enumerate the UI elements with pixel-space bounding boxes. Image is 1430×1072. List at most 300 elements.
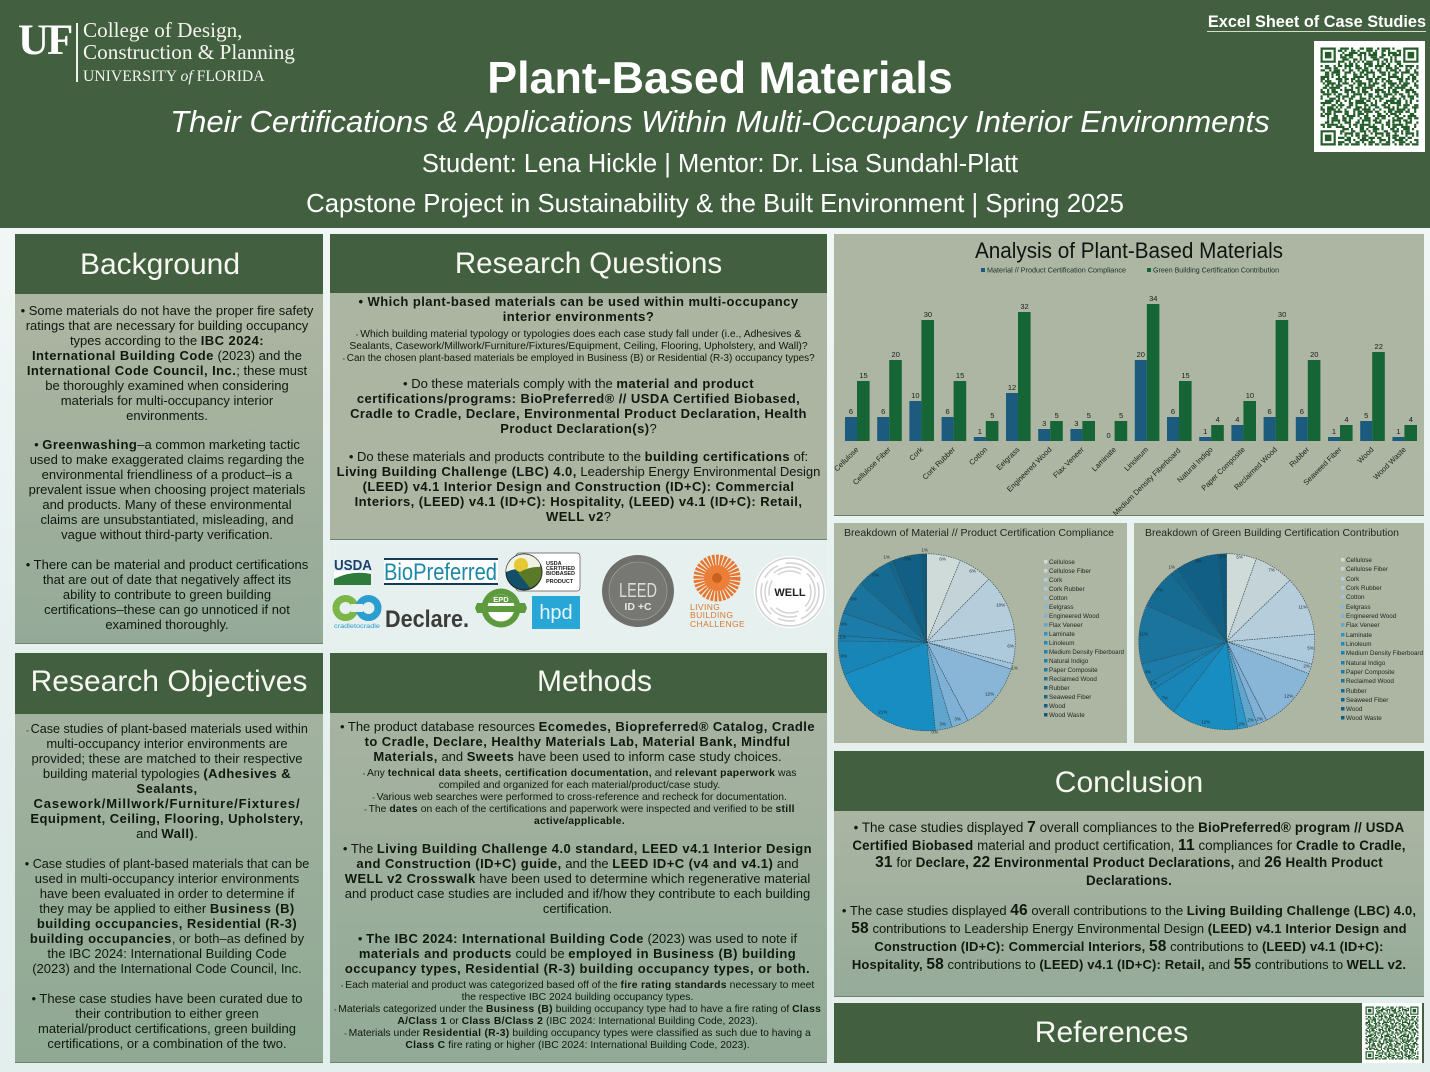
chart legend: Green Building Certification Contribution: [1153, 268, 1279, 274]
pie legend: Eelgrass: [1049, 604, 1074, 611]
pie legend: Cotton: [1049, 595, 1068, 602]
question 3: • Do these materials and products contribute to the building certifications of:: [349, 449, 808, 464]
panel: methods: [330, 653, 827, 1063]
bars: Medium Density Fiberboard: Medium Density Fiberboard: [1111, 446, 1182, 516]
pie legend: [1044, 559, 1124, 719]
text: LBC and LEED guides: and Construction (ID+C) guide, and the LEED ID+C (v4 and v4.1) and: [356, 856, 799, 871]
pie legend: Engineered Wood: [1049, 613, 1100, 620]
pie legend: Cellulose: [1049, 559, 1075, 566]
text: out of date certifications: ability to contribute to green building: [63, 587, 271, 602]
text: case studies matched: provided; these are matched to their respective: [32, 751, 302, 766]
pie percent labels: 1%: [883, 554, 890, 559]
logo: USDA certified biobased: BIOBASED: [546, 571, 575, 577]
bars: Cellulose Fiber: [851, 350, 902, 487]
research objectives body: [15, 714, 323, 1063]
UF monogram: UF: [18, 17, 71, 64]
pie percent labels: 2%: [1247, 718, 1254, 723]
bars: Paper Composite: 10: [1246, 391, 1254, 400]
text: occupancy evaluation: [25, 857, 309, 976]
pie percent labels: [1139, 554, 1314, 727]
bars: Cork: Cork: [907, 445, 925, 463]
pie percent labels: 4%: [840, 621, 847, 626]
pie legend: Wood Waste: [1346, 715, 1382, 722]
bars: Flax Veneer: 5: [1087, 411, 1091, 420]
bars: Reclaimed Wood: 30: [1278, 310, 1286, 319]
logo: USDA certified biobased: PRODUCT: [546, 579, 574, 585]
bars: Rubber: Rubber: [1287, 445, 1312, 469]
text: case studies matched: ◦ Case studies of plant-based materials used within: [26, 722, 308, 736]
question 3: Interiors, (LEED) v4.1 (ID+C): Hospitality, (LEED) v4.1 (ID+C): Retail,: [355, 494, 802, 509]
chart legend: Material // Product Certification Compliance: [987, 268, 1126, 274]
bars: Cellulose Fiber: 20: [892, 350, 900, 359]
bars: Cotton: 1: [978, 427, 982, 436]
bars: Eelgrass: [994, 302, 1031, 472]
pie legend: Rubber: [1346, 688, 1367, 695]
bars: Cork Rubber: [921, 371, 966, 481]
heading: conclusion: [834, 751, 1424, 811]
pie slices: [838, 554, 1015, 731]
logo: Living Building Challenge: LIVING: [690, 602, 720, 612]
bar chart: analysis of plant-based materials: [834, 234, 1424, 516]
pie percent labels: 11%: [1298, 605, 1307, 610]
title: Plant-Based Materials: [487, 53, 953, 103]
text: occupancy evaluation: • Case studies of plant-based materials that can be: [25, 857, 309, 871]
bars: Laminate: Laminate: [1090, 445, 1118, 473]
pie legend: Linoleum: [1346, 641, 1372, 648]
logo: WELL: [754, 556, 826, 628]
text: fire rating sub-points: A/Class 1 or Class B/Class 2 (IBC 2024: International Building Code, 2023).: [397, 1016, 758, 1027]
logo: Living Building Challenge: [690, 561, 745, 629]
text: occupancy evaluation: have been evaluated in order to determine if: [40, 886, 294, 901]
pie legend: Laminate: [1346, 632, 1372, 639]
pie legend: Flax Veneer: [1346, 622, 1380, 629]
bars: Eelgrass: Eelgrass: [994, 445, 1022, 472]
bars: Cork: [907, 310, 934, 463]
logo: Living Building Challenge: BUILDING: [690, 610, 733, 620]
bars: Rubber: [1287, 350, 1320, 469]
question 1 sub-points: ◦ Which building material typology or typologies does each case study fall under (i.e., Adhesives &: [356, 329, 801, 340]
pie legend: Cellulose Fiber: [1346, 566, 1388, 573]
pie legend: Reclaimed Wood: [1346, 678, 1394, 685]
college name: [83, 18, 295, 64]
pie percent labels: 10%: [996, 602, 1005, 607]
text: IBC: materials and products could be employed in Business (B) building: [359, 946, 796, 961]
text: product databases: [340, 719, 815, 764]
bars: Reclaimed Wood: 6: [1268, 407, 1272, 416]
pie legend: Cork Rubber: [1346, 585, 1382, 592]
pie percent labels: 21%: [878, 709, 887, 714]
bars: Medium Density Fiberboard: 6: [1171, 407, 1175, 416]
text: IBC: [345, 931, 810, 976]
panel: conclusion: [834, 751, 1424, 997]
bars: Cellulose: 15: [859, 371, 868, 380]
pie percent labels: 8%: [1195, 559, 1202, 564]
pie legend: Natural Indigo: [1049, 658, 1089, 665]
logo: LEED ID+C: LEED: [619, 580, 657, 602]
logo: USDA certified biobased: [506, 553, 580, 591]
pie percent labels: 6%: [872, 572, 879, 577]
subtitle: Their Certifications & Applications Within Multi-Occupancy Interior Environments: [170, 104, 1270, 139]
research questions body: [330, 293, 827, 540]
pie legend: Laminate: [1049, 631, 1075, 638]
heading: conclusion: Conclusion: [1055, 766, 1203, 799]
pie percent labels: 2%: [1238, 722, 1245, 727]
pie percent labels: 12%: [1284, 694, 1293, 699]
question 3: WELL v2?: [546, 509, 611, 524]
bars: Engineered Wood: 5: [1055, 411, 1059, 420]
logo: USDA certified biobased: USDA: [546, 561, 562, 567]
text: case studies matched: and Wall).: [136, 826, 198, 841]
text: greenwashing: and products. Many of these environmental: [42, 497, 292, 512]
text: fire safety: International Code Council, Inc.; these must: [27, 363, 307, 378]
QR code: case studies: [1314, 41, 1425, 152]
pie percent labels: 6%: [969, 568, 976, 573]
pie percent labels: 1%: [1150, 681, 1157, 686]
logo: HPD: hpd: [539, 602, 573, 624]
question 3: Living Building Challenge (LBC) 4.0, Leadership Energy Environmental Design: [337, 464, 820, 479]
pie percent labels: 6%: [1007, 643, 1014, 648]
text: green building contribution findings: • The case studies displayed 46 overall contributions to the Living Building Challenge (LBC) 4.0,: [842, 902, 1416, 919]
text: LBC and LEED guides: WELL v2 Crosswalk have been used to determine which regenerative material: [345, 871, 810, 886]
pie legend: Paper Composite: [1049, 667, 1098, 674]
text: documentation sub-points: ◦ Various web searches were performed to cross-reference and recheck for documentation.: [372, 792, 787, 803]
pie legend: Seaweed Fiber: [1346, 697, 1388, 704]
text: documentation sub-points: active/applicable.: [534, 816, 625, 827]
bars: Medium Density Fiberboard: [1111, 371, 1192, 518]
pie legend: Wood: [1346, 706, 1363, 713]
pie percent labels: 1%: [1011, 665, 1018, 670]
question 1: interior environments?: [503, 309, 654, 324]
methods body: [330, 713, 827, 1063]
bars: Cellulose: [832, 371, 870, 473]
chart title: Analysis of Plant-Based Materials: [975, 238, 1283, 263]
bars: Paper Composite: 4: [1235, 415, 1239, 424]
heading: methods: Methods: [537, 665, 652, 698]
logo divider: [76, 23, 78, 82]
pie legend: Cork: [1346, 576, 1360, 583]
panel: research questions: [330, 234, 827, 540]
text: fire safety: • Some materials do not have the proper fire safety: [21, 303, 313, 318]
text: out of date certifications: examined thoroughly.: [105, 617, 229, 632]
text: product databases: Materials, and Sweets have been used to inform case study choices.: [373, 749, 782, 764]
question 3: [337, 449, 820, 524]
text: greenwashing: vague without third-party verification.: [61, 527, 273, 542]
bars: Reclaimed Wood: Reclaimed Wood: [1232, 445, 1279, 492]
question 3: (LEED) v4.1 Interior Design and Construction (ID+C): Commercial: [363, 479, 794, 494]
bars: Cotton: [967, 411, 998, 467]
bars: Rubber: 20: [1310, 350, 1318, 359]
pie legend: Wood: [1049, 703, 1066, 710]
bars: Engineered Wood: Engineered Wood: [1005, 445, 1054, 494]
bars: Eelgrass: 32: [1020, 302, 1029, 311]
bars: Wood: 22: [1375, 342, 1383, 351]
text: LBC and LEED guides: • The Living Building Challenge 4.0 standard, LEED v4.1 Interior Design: [343, 841, 812, 856]
pie percent labels: 11%: [1139, 632, 1148, 637]
heading: background: [15, 234, 323, 294]
text: occupancy evaluation: they may be applied to either Business (B): [39, 901, 295, 916]
text: curation: certifications, or a combination of the two.: [47, 1036, 287, 1051]
question 1 sub-points: Sealants, Casework/Millwork/Furniture/Fixtures/Equipment, Ceiling, Flooring, Upholstery, and Wall)?: [349, 341, 808, 352]
pie percent labels: 6%: [850, 596, 857, 601]
heading: methods: [330, 653, 827, 713]
text: greenwashing: [29, 437, 305, 542]
pie percent labels: 7%: [1161, 696, 1168, 701]
pie percent labels: 12%: [985, 691, 994, 696]
text: case studies matched: multi-occupancy interior environments are: [46, 736, 288, 751]
pie title: Breakdown of Green Building Certification Contribution: [1145, 527, 1399, 539]
pie legend: Linoleum: [1049, 640, 1075, 647]
bars: Rubber: 6: [1300, 407, 1304, 416]
text: green building contribution findings: [842, 902, 1416, 973]
pie legend: Engineered Wood: [1346, 613, 1397, 620]
text: case studies matched: Equipment, Ceiling, Flooring, Upholstery,: [30, 811, 304, 826]
text: fire rating sub-points: the respective IBC 2024 building occupancy types.: [462, 992, 693, 1003]
pie chart: green building certification contribution: [1134, 523, 1424, 743]
pie legend: Paper Composite: [1346, 669, 1395, 676]
bars: Wood: Wood: [1355, 445, 1376, 465]
pie percent labels: 4%: [1144, 670, 1151, 675]
bars: Cotton: 5: [990, 411, 994, 420]
pie percent labels: 6%: [939, 556, 946, 561]
pie percent labels: 2%: [1303, 664, 1310, 669]
text: out of date certifications: [26, 557, 308, 632]
pie title: Breakdown of Material // Product Certification Compliance: [844, 527, 1114, 539]
text: IBC: • The IBC 2024: International Building Code (2023) was used to note if: [358, 931, 797, 946]
pie percent labels: 7%: [1268, 568, 1275, 573]
text: certification compliance findings: Certified Biobased material and product certification, 11 compliances for Cradle to Cradle,: [852, 836, 1406, 854]
text: out of date certifications: certifications–these can go unnoticed if not: [44, 602, 290, 617]
pie legend: Cellulose Fiber: [1049, 568, 1091, 575]
bars: Reclaimed Wood: [1232, 310, 1288, 492]
text: occupancy evaluation: the IBC 2024: International Building Code: [47, 946, 287, 961]
bars: Laminate: [1090, 411, 1127, 473]
logo: Declare: Declare.: [385, 606, 469, 633]
pie percent labels: 5%: [904, 556, 911, 561]
text: fire rating sub-points: ◦ Materials categorized under the Business (B) building occupancy type had to have a fire rating of Class: [334, 1004, 821, 1015]
bars: Natural Indigo: [1175, 415, 1224, 484]
pie legend: Reclaimed Wood: [1049, 676, 1097, 683]
pie chart: material and product certification compliance: [834, 523, 1127, 743]
university name: UNIVERSITY of FLORIDA: [83, 68, 265, 85]
bars: Linoleum: Linoleum: [1122, 445, 1150, 473]
question 2: certifications/programs: BioPreferred® // USDA Certified Biobased,: [357, 391, 800, 406]
pie percent labels: 1%: [1219, 554, 1226, 559]
text: fire rating sub-points: ◦ Materials under Residential (R-3) building occupancy types were classified as such due to having a: [344, 1028, 811, 1039]
question 2: Cradle to Cradle, Declare, Environmental Product Declaration, Health: [350, 406, 807, 421]
pie percent labels: 12%: [1201, 720, 1210, 725]
logo: EPD: EPD: [493, 595, 509, 604]
text: case studies matched: [26, 722, 308, 841]
pie percent labels: 2%: [1256, 717, 1263, 722]
text: case studies matched: Sealants,: [136, 781, 198, 796]
heading: research objectives: Research Objectives: [31, 665, 307, 698]
bars: Wood: [1355, 342, 1385, 465]
college name: College of Design,: [83, 18, 242, 42]
bars: Engineered Wood: [1005, 411, 1063, 494]
conclusion body: [834, 811, 1424, 997]
text: fire safety: [21, 303, 314, 423]
text: out of date certifications: • There can be material and product certifications: [26, 557, 308, 572]
panel: background: [15, 234, 323, 644]
pie legend: [1341, 557, 1423, 722]
capstone line: Capstone Project in Sustainability & the Built Environment | Spring 2025: [306, 190, 1124, 218]
college name: Construction & Planning: [83, 40, 295, 64]
text: curation: • These case studies have been curated due to: [32, 991, 302, 1006]
text: greenwashing: environmental friendliness of a product–is a: [42, 467, 292, 482]
logo: USDA certified biobased: CERTIFIED: [546, 566, 575, 572]
bars: Flax Veneer: 3: [1074, 419, 1078, 428]
text: documentation sub-points: ◦ The dates on each of the certifications and paperwork were inspected and verified to be still: [364, 804, 795, 815]
bars: Natural Indigo: Natural Indigo: [1175, 445, 1215, 484]
text: product databases: to Cradle, Declare, Healthy Materials Lab, Material Bank, Mindful: [365, 734, 790, 749]
text: out of date certifications: that are out of date that negatively affect its: [43, 572, 291, 587]
pie percent labels: 6%: [840, 653, 847, 658]
bars: Wood Waste: [1371, 415, 1417, 481]
bars: Eelgrass: 12: [1008, 383, 1016, 392]
bars: Flax Veneer: Flax Veneer: [1051, 445, 1086, 480]
heading: research questions: Research Questions: [455, 247, 722, 280]
pie legend: Medium Density Fiberboard: [1049, 649, 1124, 656]
bars: Paper Composite: Paper Composite: [1199, 445, 1247, 492]
bars: Cellulose Fiber: 6: [881, 407, 885, 416]
logo: WELL: WELL: [774, 587, 806, 599]
pie percent labels: 1%: [921, 547, 928, 552]
logo: BioPreferred: BioPreferred: [384, 559, 497, 586]
text: occupancy evaluation: (2023) and the International Code Council, Inc.: [32, 961, 302, 976]
bars: Natural Indigo: 1: [1203, 427, 1207, 436]
pie percent labels: 3%: [939, 721, 946, 726]
logo: LEED ID+C: [602, 555, 674, 627]
pie legend: Natural Indigo: [1346, 660, 1386, 667]
bars: Linoleum: [1122, 294, 1159, 473]
pie legend: Cork Rubber: [1049, 586, 1085, 593]
text: greenwashing: used to make exaggerated claims regarding the: [30, 452, 304, 467]
text: fire safety: materials for multi-occupancy interior: [61, 393, 273, 408]
bars: Linoleum: 20: [1137, 350, 1145, 359]
QR code: references: [1362, 1003, 1422, 1063]
pie legend: Flax Veneer: [1049, 622, 1083, 629]
bars: Cork: 30: [924, 310, 932, 319]
text: documentation sub-points: ◦ Any technical data sheets, certification documentation, and relevant paperwork was: [363, 768, 796, 779]
pie legend: Wood Waste: [1049, 712, 1085, 719]
question 1 sub-points: ◦ Can the chosen plant-based materials be employed in Business (B) or Residential (R-3) occupancy types?: [342, 353, 815, 364]
heading: research questions: [330, 234, 827, 293]
pie percent labels: 3%: [954, 716, 961, 721]
pie legend: Eelgrass: [1346, 604, 1370, 611]
text: fire rating sub-points: Class C fire rating or higher (IBC 2024: International Building Code, 2023).: [405, 1040, 750, 1051]
text: green building contribution findings: Construction (ID+C): Commercial Interiors, 58 contributions to (LEED) v4.1 (ID+C):: [874, 938, 1384, 955]
text: fire safety: be thoroughly examined when considering: [45, 378, 289, 393]
bars: Cork Rubber: Cork Rubber: [921, 445, 957, 481]
bars: Engineered Wood: 3: [1042, 419, 1046, 428]
pie legend: Cellulose: [1346, 557, 1372, 564]
text: certification compliance findings: Declarations.: [1086, 872, 1172, 888]
question 2: Product Declaration(s)?: [500, 421, 657, 436]
text: documentation sub-points: compiled and organized for each material/product/case study.: [439, 780, 720, 791]
header banner: [0, 0, 1430, 228]
bars: Natural Indigo: 4: [1216, 415, 1220, 424]
text: occupancy evaluation: building occupancies, Residential (R-3): [37, 916, 297, 931]
pie percent labels: 5%: [1307, 646, 1314, 651]
pie legend: Rubber: [1049, 685, 1070, 692]
bars: Cotton: Cotton: [967, 445, 989, 467]
pie legend: Cotton: [1346, 594, 1365, 601]
text: LBC and LEED guides: and product case studies are included and if/how they contribute to each building: [345, 886, 810, 901]
logo: USDA: [334, 557, 372, 585]
bars: Seaweed Fiber: Seaweed Fiber: [1301, 445, 1344, 487]
bars: Wood Waste: 1: [1396, 427, 1400, 436]
text: documentation sub-points: [363, 768, 796, 827]
text: green building contribution findings: 58 contributions to Leadership Energy Environmental Design (LEED) v4.1 Interior Design and: [851, 920, 1407, 937]
background body: [15, 294, 323, 644]
heading: research objectives: [15, 653, 323, 714]
text: certification compliance findings: 31 for Declare, 22 Environmental Product Declarations, and 26 Health Product: [875, 854, 1383, 871]
bars: Seaweed Fiber: [1301, 415, 1353, 487]
bars: Cellulose: 6: [849, 407, 853, 416]
heading: background: Background: [80, 248, 240, 281]
text: certification compliance findings: • The case studies displayed 7 overall compliances to the BioPreferred® program // USDA: [854, 819, 1404, 836]
text: LBC and LEED guides: [343, 841, 812, 916]
text: occupancy evaluation: used in multi-occupancy interior environments: [35, 871, 299, 886]
question 1 sub-points: [342, 329, 815, 364]
bars: Paper Composite: [1199, 391, 1256, 492]
bars: Wood Waste: Wood Waste: [1371, 445, 1408, 481]
pie percent labels: 7%: [1156, 588, 1163, 593]
text: product databases: • The product database resources Ecomedes, Biopreferred® Catalog, Cradle: [340, 719, 815, 734]
text: fire safety: types according to the IBC 2024:: [70, 333, 264, 348]
pie percent labels: 1%: [839, 634, 846, 639]
question 1: [358, 294, 799, 324]
text: greenwashing: • Greenwashing–a common marketing tactic: [34, 437, 300, 452]
bars: Linoleum: 34: [1149, 294, 1157, 303]
panel: research objectives: [15, 653, 323, 1063]
bars: Wood: 5: [1364, 411, 1368, 420]
pie percent labels: 0%: [931, 729, 938, 734]
logo: HPD: [532, 596, 580, 629]
pie percent labels: 5%: [1236, 555, 1243, 560]
pie percent labels: 1%: [1168, 565, 1175, 570]
logo: Living Building Challenge: CHALLENGE: [690, 619, 745, 629]
student and mentor: Student: Lena Hickle | Mentor: Dr. Lisa Sundahl-Platt: [422, 150, 1018, 178]
text: fire rating sub-points: ◦ Each material and product was categorized based off of the fire rating standards necessary to meet: [341, 980, 814, 991]
question 1: • Which plant-based materials can be used within multi-occupancy: [358, 294, 799, 309]
text: fire rating sub-points: [334, 980, 821, 1051]
bars: Wood Waste: 4: [1409, 415, 1413, 424]
logo: cradle to cradle: cradletocradle: [334, 623, 380, 630]
bars: Laminate: 5: [1119, 411, 1123, 420]
text: curation: [32, 991, 302, 1051]
logo: USDA: USDA: [334, 557, 372, 574]
logo: LEED ID+C: ID +C: [624, 601, 652, 613]
pie slices: [1139, 554, 1315, 730]
text: IBC: occupancy types, Residential (R-3) building occupancy types, or both.: [345, 961, 810, 976]
text: occupancy evaluation: building occupancies, or both–as defined by: [30, 931, 304, 946]
logo: cradle to cradle: [334, 598, 380, 630]
panel: references: [834, 1003, 1424, 1063]
excel link: Excel Sheet of Case Studies: [1208, 13, 1426, 31]
text: greenwashing: prevalent issue when choosing project materials: [29, 482, 305, 497]
pie legend: Seaweed Fiber: [1049, 694, 1091, 701]
bars: Cork Rubber: 15: [956, 371, 964, 380]
text: LBC and LEED guides: certification.: [543, 901, 612, 916]
chart legend: [981, 268, 1279, 274]
certification logos strip: [332, 552, 826, 633]
bars: Seaweed Fiber: 4: [1344, 415, 1349, 424]
bars: Seaweed Fiber: 1: [1332, 427, 1336, 436]
text: case studies matched: building material typologies (Adhesives &: [43, 766, 291, 781]
heading: references: References: [1035, 1016, 1188, 1049]
UF logo: [18, 17, 295, 85]
